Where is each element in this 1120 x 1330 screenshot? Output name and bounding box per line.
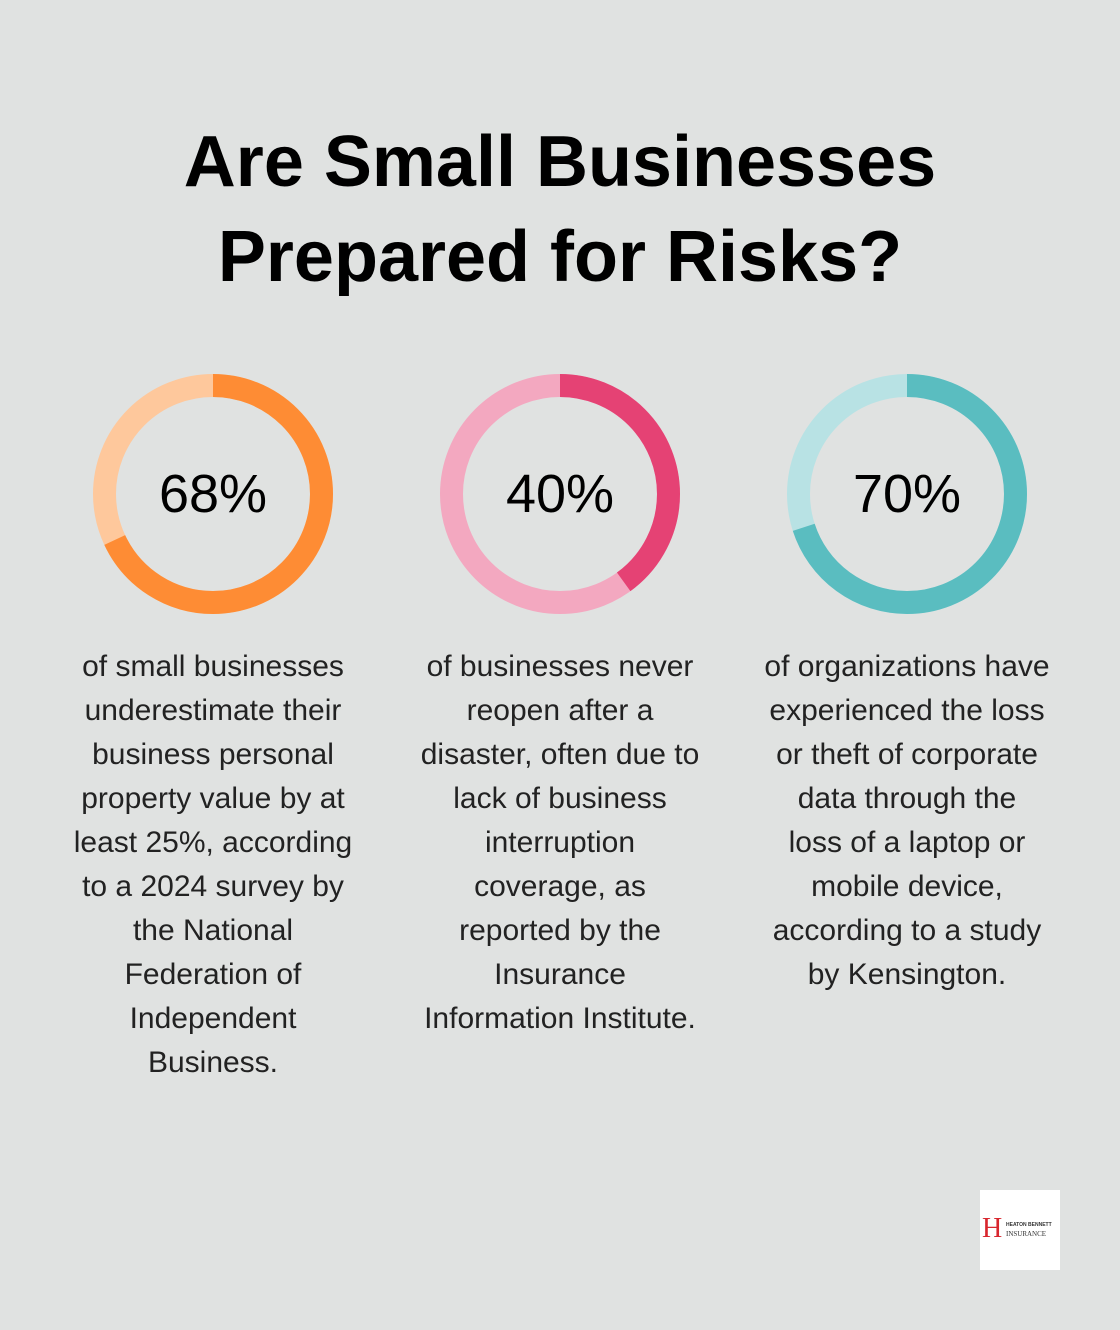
text: 68%: Independent [130,1002,296,1035]
text: 40%: interruption [485,826,635,859]
donut: 68%: 68% [159,464,267,524]
text: 68%: the National [133,914,293,947]
text: 40%: disaster, often due to [421,738,699,771]
text: 68%: Federation of [125,958,301,991]
text: 70%: of organizations have [764,650,1050,683]
donut: 40%: 40% [506,464,614,524]
title: Prepared for Risks? [218,217,902,297]
text: 70%: according to a study [773,914,1041,947]
text: 70%: or theft of corporate [776,738,1038,771]
text: 70% [764,650,1050,991]
logo [980,1190,1060,1270]
text: 68%: of small businesses [82,650,344,683]
text: 40%: reopen after a [467,694,653,727]
text: 40%: of businesses never [427,650,693,683]
text: 70%: by Kensington. [808,958,1006,991]
text: 70%: mobile device, [811,870,1003,903]
text: 40%: reported by the [459,914,661,947]
text: 68%: Business. [148,1046,278,1079]
text: 68%: to a 2024 survey by [82,870,344,903]
logo: HEATON BENNETT [1006,1222,1052,1228]
donut: 68% [93,374,333,614]
text: 70%: experienced the loss [769,694,1045,727]
text: 68%: underestimate their [85,694,341,727]
text: 40% [421,650,699,1035]
donut: 40% [440,374,680,614]
text: 40%: coverage, as [474,870,646,903]
text: 40%: Information Institute. [424,1002,696,1035]
donut: 70% [787,374,1027,614]
text: 40%: Insurance [494,958,626,991]
logo: H [982,1213,1002,1244]
text: 40%: lack of business [453,782,667,815]
logo: INSURANCE [1006,1230,1046,1238]
text: 70%: loss of a laptop or [789,826,1025,859]
text: 68% [74,650,352,1079]
title: Are Small Businesses [184,122,936,202]
title [184,122,936,297]
text: 70%: data through the [798,782,1016,815]
text: 68%: business personal [92,738,334,771]
text: 68%: least 25%, according [74,826,352,859]
text: 68%: property value by at [81,782,345,815]
donut: 70%: 70% [853,464,961,524]
